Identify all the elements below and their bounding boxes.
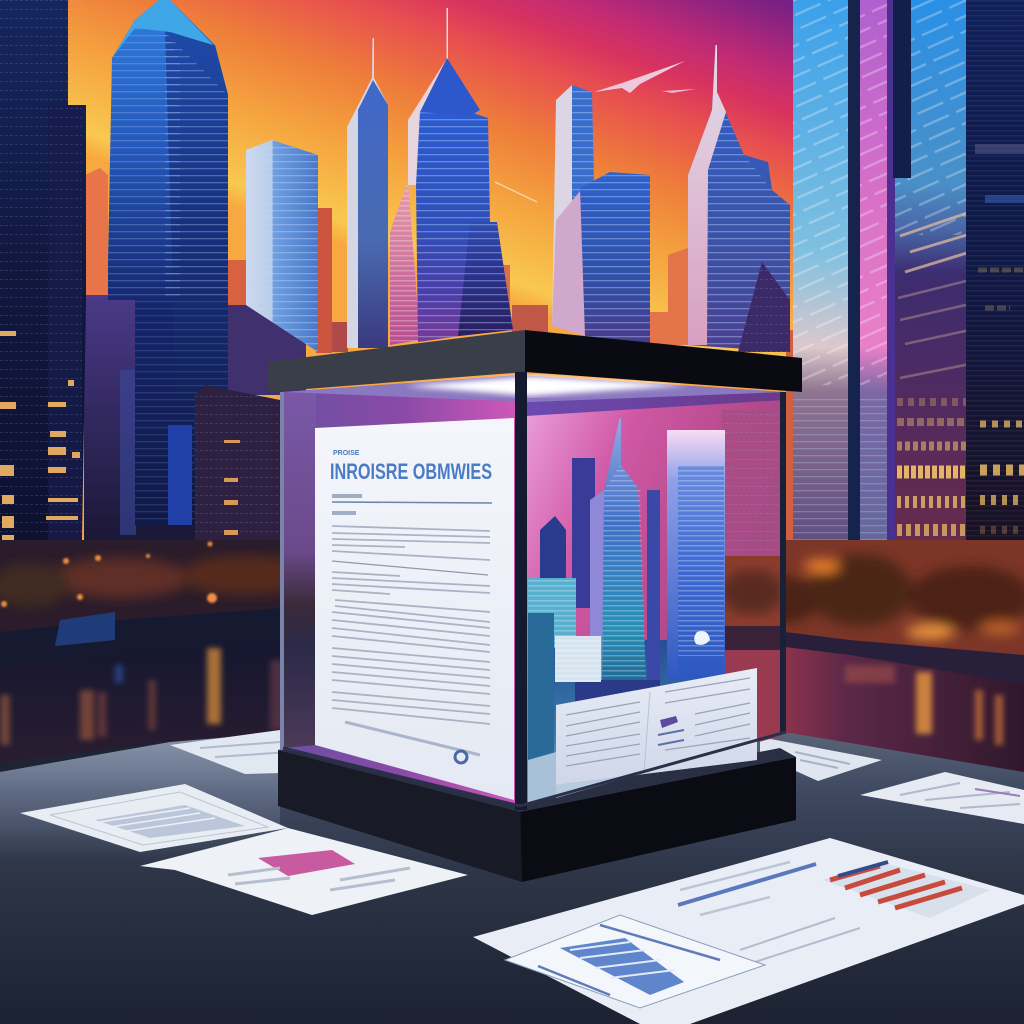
tower: far right dark	[966, 0, 1024, 565]
tower: pink foreground	[860, 0, 895, 570]
paper: back right	[760, 737, 882, 781]
paper: back left	[170, 730, 315, 774]
lit windows	[0, 331, 80, 541]
sunset sky	[0, 0, 1024, 570]
inner document sheet	[505, 915, 765, 1008]
small report inside the case	[556, 668, 757, 785]
tower: right spire	[688, 45, 790, 352]
document body text lines	[332, 526, 490, 755]
miniature city in the case	[528, 418, 786, 805]
document rule and subtitle	[332, 496, 492, 513]
building: brown block behind case	[195, 385, 280, 550]
river left with reflections	[0, 636, 312, 762]
river right with reflections	[728, 640, 1024, 772]
tower: pale box	[246, 140, 318, 352]
glass pane right	[526, 375, 784, 805]
table surface	[0, 733, 1024, 1024]
distant hazy buildings	[84, 168, 688, 535]
riverbank right	[728, 625, 1024, 684]
case roof	[267, 330, 802, 392]
tower: light blue foreground	[793, 0, 849, 560]
case ceiling light	[283, 375, 784, 402]
riverbank left	[0, 606, 312, 664]
document inside the case	[315, 418, 514, 800]
tower: blue and purple with lit rows	[893, 0, 972, 570]
paper: bottom right report	[473, 838, 1024, 1024]
tower: slim spire	[347, 38, 388, 348]
tower: central blue	[390, 8, 513, 345]
document heading: INROISRE OBMWIES	[330, 459, 492, 484]
case frame posts	[280, 372, 786, 810]
document small label: PROISE	[333, 450, 360, 457]
plane and contrails	[495, 61, 696, 202]
paper: far right	[860, 772, 1024, 824]
glass pane left	[283, 375, 520, 805]
tower: stepped pair	[552, 85, 650, 345]
riverside trees left	[0, 540, 312, 636]
striped red chart	[822, 862, 990, 918]
paper: left lower	[140, 828, 468, 915]
display case base	[278, 745, 796, 882]
tower: tall blue left	[108, 0, 228, 525]
paper: left upper	[20, 784, 288, 852]
tower: dark strip	[848, 0, 860, 560]
document seal	[455, 751, 467, 763]
riverside trees right	[728, 540, 1024, 660]
tower: far left dark	[0, 0, 86, 541]
